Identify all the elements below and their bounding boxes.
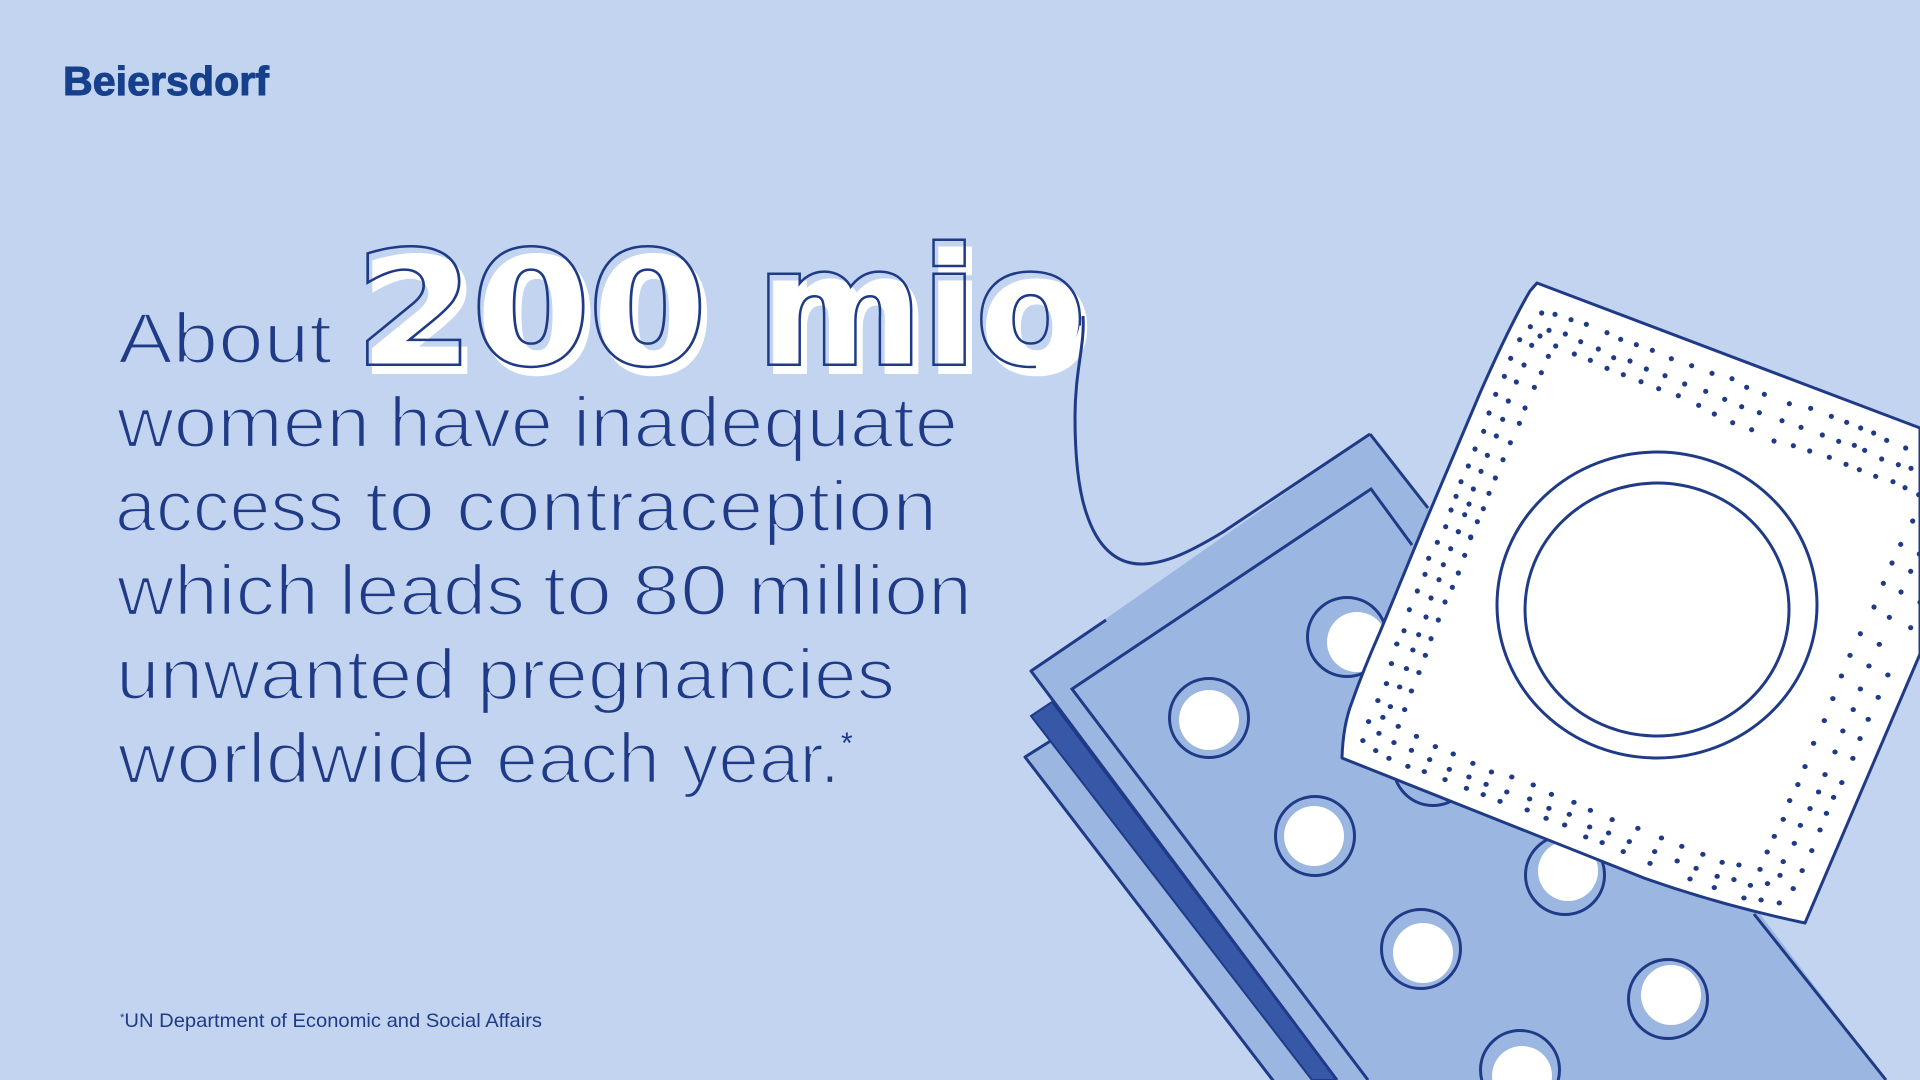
- dark side strip: [1031, 702, 1337, 1080]
- packet body: [1342, 283, 1920, 923]
- under sheet: [1025, 735, 1340, 1080]
- line: which leads to 80 million: which: [116, 552, 319, 631]
- line: which leads to 80 million: leads: [339, 552, 525, 631]
- big number white fill: 200 mio: 200: [362, 227, 712, 408]
- asterisk: *: [841, 727, 853, 760]
- patch opening the letter o: [1036, 326, 1083, 367]
- line: access to contraception: to: [365, 468, 435, 547]
- line: which leads to 80 million: [116, 552, 972, 631]
- pill 7: [1480, 1030, 1560, 1080]
- hidden pill: [1394, 726, 1472, 806]
- dots: top and upper left: [1481, 313, 1919, 521]
- line: unwanted pregnancies: unwanted: [116, 636, 456, 715]
- line: women have inadequate: [116, 384, 958, 463]
- outer blister sheet: [1031, 434, 1886, 1080]
- dots: mid left band: [1446, 449, 1477, 537]
- line: About: About: [118, 300, 332, 379]
- inner ring: [1525, 483, 1789, 736]
- pill 6: [1628, 960, 1708, 1038]
- line: which leads to 80 million: million: [748, 552, 972, 631]
- line: worldwide each year.: year.: [682, 720, 840, 799]
- illustration: contraceptive pill blister pack: [1025, 434, 1886, 1080]
- line: access to contraception: contraception: [456, 468, 937, 547]
- pill 5: [1526, 836, 1604, 914]
- line: worldwide each year.: each: [496, 720, 660, 799]
- big number white fill: 200 mio: mio: [763, 222, 1091, 409]
- outer sheet edges: [1031, 434, 1886, 1080]
- line: which leads to 80 million: 80: [632, 552, 728, 631]
- main text block: [115, 300, 972, 799]
- footnote: *: [120, 1012, 125, 1024]
- dots: bottom band: [1363, 644, 1888, 903]
- pill 4: [1382, 910, 1460, 988]
- pill 1: [1308, 598, 1387, 676]
- line: access to contraception: access: [115, 468, 344, 547]
- line: unwanted pregnancies: pregnancies: [477, 636, 895, 715]
- dots: right band: [1860, 544, 1920, 634]
- dots: left band: [1404, 532, 1471, 639]
- line: which leads to 80 million: to: [543, 552, 612, 631]
- line: women have inadequate: women: [116, 384, 370, 463]
- illustration: condom packet: [1342, 283, 1920, 923]
- pill 2: [1170, 678, 1248, 758]
- line: women have inadequate: have: [389, 384, 553, 463]
- line: access to contraception: [115, 468, 937, 547]
- big number outline: 200 mio: [366, 238, 1082, 368]
- line: worldwide each year.: [117, 720, 840, 799]
- footnote: UN Department of Economic and Social Affairs: [124, 1010, 542, 1032]
- pill 3: [1276, 796, 1354, 876]
- line: unwanted pregnancies: [116, 636, 895, 715]
- line: worldwide each year.: worldwide: [117, 720, 476, 799]
- line: women have inadequate: inadequate: [573, 384, 958, 463]
- logo: Beiersdorf: Beiersdorf: [63, 58, 269, 104]
- inner blister edge: [1072, 489, 1412, 1080]
- connector line from the o to the blister pack: [1075, 316, 1370, 564]
- outer ring: [1497, 452, 1817, 758]
- big number white fill: 200 mio: [362, 222, 1091, 409]
